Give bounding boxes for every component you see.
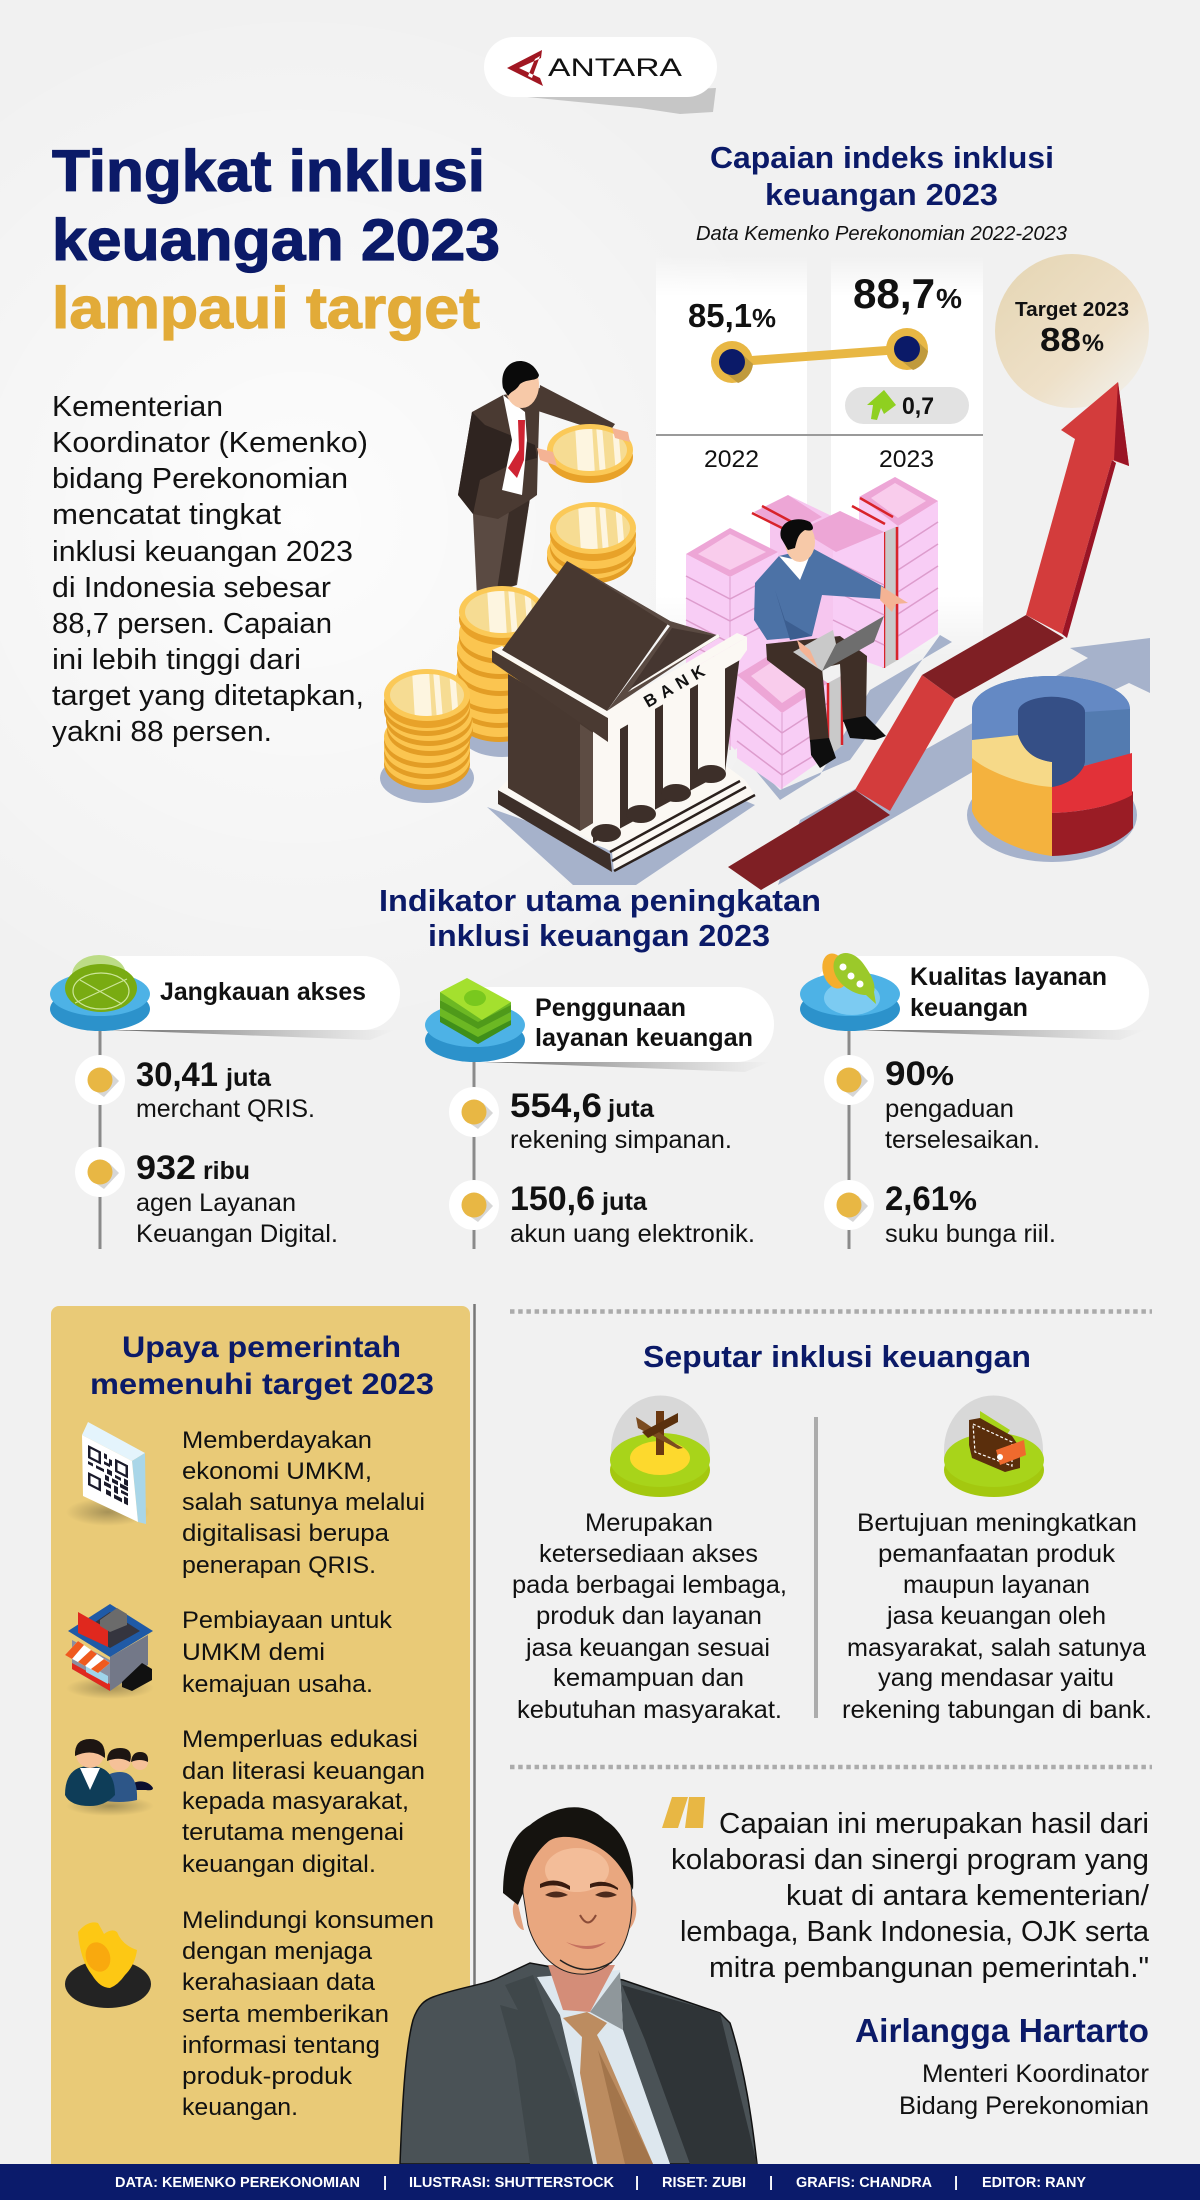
intro paragraph: Kementerian <box>52 391 223 423</box>
value 2023: % <box>936 283 962 314</box>
year labels: 2022 <box>704 446 759 473</box>
value 2022: 85,1 <box>688 297 752 334</box>
intro paragraph: Koordinator (Kemenko) <box>52 427 368 459</box>
intro paragraph: mencatat tingkat <box>52 499 281 531</box>
icon: quote mark <box>662 1797 705 1828</box>
coin stack: middle <box>454 586 545 757</box>
red growth arrow <box>728 382 1129 890</box>
section heading: indicators: Indikator utama peningkatan <box>379 883 821 918</box>
hand <box>880 586 908 612</box>
item: agen <box>75 1147 338 1248</box>
text block: definition: kemampuan dan <box>553 1664 744 1692</box>
change pill <box>845 387 969 424</box>
intro paragraph <box>52 391 368 748</box>
front stack <box>737 650 843 789</box>
indicator column: Jangkauan akses <box>50 955 400 1249</box>
item text 4: keuangan. <box>182 2094 298 2121</box>
item: pengaduan: pengaduan <box>885 1095 1014 1123</box>
title <box>52 139 500 341</box>
jacket <box>458 388 540 519</box>
quote text: mitra pembangunan pemerintah." <box>709 1952 1149 1984</box>
line chart <box>656 256 983 656</box>
item: agen: Keuangan Digital. <box>136 1220 338 1248</box>
footer: DATA: KEMENKO PEREKONOMIAN <box>115 2175 360 2191</box>
intro paragraph: bidang Perekonomian <box>52 463 348 495</box>
yellow segment <box>972 740 1052 856</box>
text block: purpose: masyarakat, salah satunya <box>847 1634 1146 1662</box>
item: merchant QRIS <box>75 1055 315 1123</box>
footer <box>0 2164 1200 2200</box>
item: akun: akun uang elektronik. <box>510 1220 755 1248</box>
pill shadow <box>110 1030 395 1040</box>
item text 4: kerahasiaan data <box>182 1969 375 1996</box>
pill header <box>815 956 1149 1030</box>
item text 4: dengan menjaga <box>182 1938 372 1965</box>
quote text <box>671 1808 1150 1984</box>
held coin <box>547 424 633 483</box>
wall <box>508 674 593 831</box>
item: suku bunga: % <box>949 1185 977 1216</box>
item text 3: keuangan digital. <box>182 1851 376 1878</box>
item text 4: informasi tentang <box>182 2032 380 2059</box>
head <box>785 522 815 562</box>
item: akun: juta <box>601 1188 648 1216</box>
ears and face <box>513 1895 636 1930</box>
year labels <box>704 446 934 473</box>
intro paragraph: 88,7 persen. Capaian <box>52 608 332 640</box>
text block: definition: ketersediaan akses <box>539 1540 758 1568</box>
shoes <box>810 716 886 768</box>
text block: definition: kebutuhan masyarakat. <box>517 1696 782 1724</box>
point 2023 <box>886 328 928 370</box>
man with coin <box>458 361 633 598</box>
text block: purpose: rekening tabungan di bank. <box>842 1696 1152 1724</box>
item text 3: kepada masyarakat, <box>182 1788 409 1815</box>
section heading: indicators <box>379 883 821 953</box>
text block: purpose: maupun layanan <box>903 1571 1090 1599</box>
awning <box>65 1641 110 1673</box>
item: rekening: rekening simpanan. <box>510 1126 732 1154</box>
raised arm <box>538 385 615 434</box>
intro paragraph: inklusi keuangan 2023 <box>52 536 353 568</box>
icon: globe <box>50 955 150 1031</box>
item: suku bunga <box>824 1180 1056 1248</box>
title: keuangan 2023 <box>52 208 500 273</box>
panel heading <box>90 1331 434 1401</box>
pill header <box>66 956 400 1030</box>
item text 1: penerapan QRIS. <box>182 1552 376 1579</box>
text block: definition: produk dan layanan <box>536 1602 762 1630</box>
pill shadow <box>859 1030 1145 1040</box>
item text 1: Memberdayakan <box>182 1427 372 1454</box>
intro paragraph: yakni 88 persen. <box>52 716 272 748</box>
item text 4: serta memberikan <box>182 2001 389 2028</box>
target badge <box>995 254 1149 408</box>
item text 2: Pembiayaan untuk <box>182 1607 393 1634</box>
item: akun: 150,6 <box>510 1180 595 1218</box>
tie <box>563 2012 653 2164</box>
background gray arrow <box>778 638 1150 885</box>
icon: wallet <box>944 1395 1044 1497</box>
speaker <box>855 2012 1149 2120</box>
tie <box>508 420 525 478</box>
text block: definition <box>512 1509 787 1724</box>
icon: chat bubbles <box>800 950 900 1031</box>
panel: Upaya pemerintah <box>51 1306 470 2164</box>
section heading: Seputar: Seputar inklusi keuangan <box>643 1339 1031 1374</box>
text block: purpose: yang mendasar yaitu <box>878 1664 1114 1692</box>
item: rekening: 554,6 <box>510 1087 602 1125</box>
back stack <box>752 477 938 668</box>
panel heading: Upaya pemerintah <box>122 1331 401 1364</box>
target badge: 88 <box>1040 321 1081 358</box>
footer: GRAFIS: CHANDRA <box>796 2175 933 2191</box>
item text 3 <box>182 1726 425 1878</box>
roof <box>68 1604 153 1657</box>
columns <box>591 668 726 842</box>
footer: | <box>769 2175 773 2191</box>
item: pengaduan <box>824 1055 1040 1154</box>
indicator column: Penggunaan layanan keuangan: layanan keuangan <box>535 1024 753 1052</box>
bank label: BANK <box>640 658 713 711</box>
collar <box>779 550 812 580</box>
indicator column: Jangkauan akses: Jangkauan akses <box>160 978 366 1006</box>
portrait <box>400 1807 757 2164</box>
jacket <box>400 1963 757 2164</box>
chart heading: keuangan 2023 <box>765 177 998 212</box>
icon: shop <box>65 1604 154 1699</box>
quote text: Capaian ini merupakan hasil dari <box>719 1808 1149 1840</box>
item: merchant QRIS: merchant QRIS. <box>136 1095 315 1123</box>
title: Tingkat inklusi <box>52 139 485 204</box>
indicator column: Kualitas layanan keuangan <box>800 950 1149 1249</box>
item: pengaduan: 90 <box>885 1055 926 1093</box>
intro paragraph: target yang ditetapkan, <box>52 680 364 712</box>
footer: | <box>635 2175 639 2191</box>
item: pengaduan: % <box>926 1060 954 1091</box>
item text 1: ekonomi UMKM, <box>182 1458 372 1485</box>
panel heading: memenuhi target 2023 <box>90 1368 434 1401</box>
roof <box>502 561 670 711</box>
footer: | <box>383 2175 387 2191</box>
icon: people <box>65 1739 154 1816</box>
shirt <box>502 395 527 495</box>
indicator column: Kualitas layanan keuangan: Kualitas layanan <box>910 963 1107 991</box>
icon: money stack <box>425 978 525 1062</box>
item text 1: salah satunya melalui <box>182 1489 425 1516</box>
coin stack: left <box>380 669 474 803</box>
neck <box>548 1965 615 2012</box>
red segment <box>1052 791 1133 856</box>
item text 3: Memperluas edukasi <box>182 1726 418 1753</box>
chart heading: Capaian indeks inklusi <box>710 140 1054 175</box>
point 2022 <box>711 341 753 383</box>
speaker: Menteri Koordinator <box>922 2060 1149 2088</box>
trousers <box>766 636 867 742</box>
item: merchant QRIS: 30,41 <box>136 1056 218 1094</box>
icon: QR code <box>66 1422 150 1526</box>
hands <box>537 428 630 466</box>
coin stack: upper <box>547 502 636 584</box>
icon: shield <box>65 1922 151 2008</box>
text block: definition: Merupakan <box>585 1509 713 1537</box>
head <box>505 362 539 408</box>
text block: purpose: Bertujuan meningkatkan <box>857 1509 1137 1537</box>
sweater <box>754 548 884 640</box>
side wall <box>110 1635 148 1691</box>
item: pengaduan: terselesaikan. <box>885 1126 1040 1154</box>
change pill: 0,7 <box>902 393 934 420</box>
intro paragraph: ini lebih tinggi dari <box>52 644 301 676</box>
bank <box>487 561 755 885</box>
item text 3: terutama mengenai <box>182 1819 404 1846</box>
chart heading <box>696 140 1067 245</box>
icon: up arrow <box>867 390 896 420</box>
item text 4: Melindungi konsumen <box>182 1907 434 1934</box>
left stack <box>686 528 778 750</box>
item: rekening <box>449 1087 732 1154</box>
title: lampaui target <box>52 276 480 341</box>
item: akun <box>449 1180 755 1248</box>
item text 2: kemajuan usaha. <box>182 1671 373 1698</box>
footer: RISET: ZUBI <box>662 2175 746 2191</box>
brows and eyes <box>540 1880 618 1890</box>
text block: purpose: jasa keuangan oleh <box>886 1602 1106 1630</box>
speaker: Bidang Perekonomian <box>899 2092 1149 2120</box>
item text 1 <box>182 1427 425 1579</box>
item text 2 <box>182 1607 393 1698</box>
footer: ILUSTRASI: SHUTTERSTOCK <box>409 2175 615 2191</box>
icon: signpost <box>610 1395 710 1497</box>
item text 1: digitalisasi berupa <box>182 1520 389 1547</box>
base <box>498 790 612 872</box>
data source: Data Kemenko Perekonomian 2022-2023 <box>696 223 1067 245</box>
indicator column: Penggunaan layanan keuangan: Penggunaan <box>535 994 686 1022</box>
indicator column: Kualitas layanan keuangan: keuangan <box>910 994 1028 1022</box>
text block: purpose: pemanfaatan produk <box>878 1540 1116 1568</box>
center hole <box>1018 697 1085 787</box>
quote text: kolaborasi dan sinergi program yang <box>671 1844 1149 1876</box>
laptop <box>822 616 884 671</box>
item: agen: 932 <box>136 1149 196 1187</box>
value 2022: % <box>752 303 776 333</box>
trousers <box>473 498 530 598</box>
item text 3: dan literasi keuangan <box>182 1758 425 1785</box>
shirt <box>537 1970 670 2164</box>
item: merchant QRIS: juta <box>225 1064 272 1092</box>
money stacks <box>686 477 952 800</box>
year labels: 2023 <box>879 446 934 473</box>
text block: definition: pada berbagai lembaga, <box>512 1571 787 1599</box>
item: suku bunga: suku bunga riil. <box>885 1220 1056 1248</box>
item: rekening: juta <box>607 1095 655 1123</box>
item: agen: ribu <box>203 1157 250 1185</box>
item text 4 <box>182 1907 434 2121</box>
item text 4: produk-produk <box>182 2063 353 2090</box>
value 2023: 88,7 <box>853 270 935 317</box>
section heading: indicators: inklusi keuangan 2023 <box>428 918 770 953</box>
nose and mouth <box>580 1915 596 1922</box>
text block: definition: jasa keuangan sesuai <box>525 1634 770 1662</box>
logo mark <box>507 50 543 86</box>
front wall <box>72 1640 110 1691</box>
quote text: kuat di antara kementerian/ <box>786 1880 1150 1912</box>
pie chart <box>967 676 1137 862</box>
target badge: % <box>1082 330 1104 357</box>
footer: EDITOR: RANY <box>982 2175 1086 2191</box>
quote text: lembaga, Bank Indonesia, OJK serta <box>680 1916 1150 1948</box>
intro paragraph: di Indonesia sebesar <box>52 572 331 604</box>
item: agen: agen Layanan <box>136 1189 296 1217</box>
target badge: Target 2023 <box>1015 299 1129 321</box>
indicator column: Penggunaan layanan keuangan <box>425 978 774 1249</box>
blue segment <box>972 676 1130 787</box>
logo <box>484 37 717 114</box>
text block: purpose <box>842 1509 1152 1724</box>
pill header <box>440 987 774 1062</box>
hair <box>503 1807 633 1905</box>
logo: ANTARA <box>548 54 682 82</box>
fascia <box>492 650 608 742</box>
speaker: Airlangga Hartarto <box>855 2012 1149 2049</box>
pill shadow <box>484 1062 770 1072</box>
item text 2: UMKM demi <box>182 1639 325 1666</box>
footer: | <box>954 2175 958 2191</box>
man with laptop <box>754 519 908 768</box>
item: suku bunga: 2,61 <box>885 1180 949 1218</box>
